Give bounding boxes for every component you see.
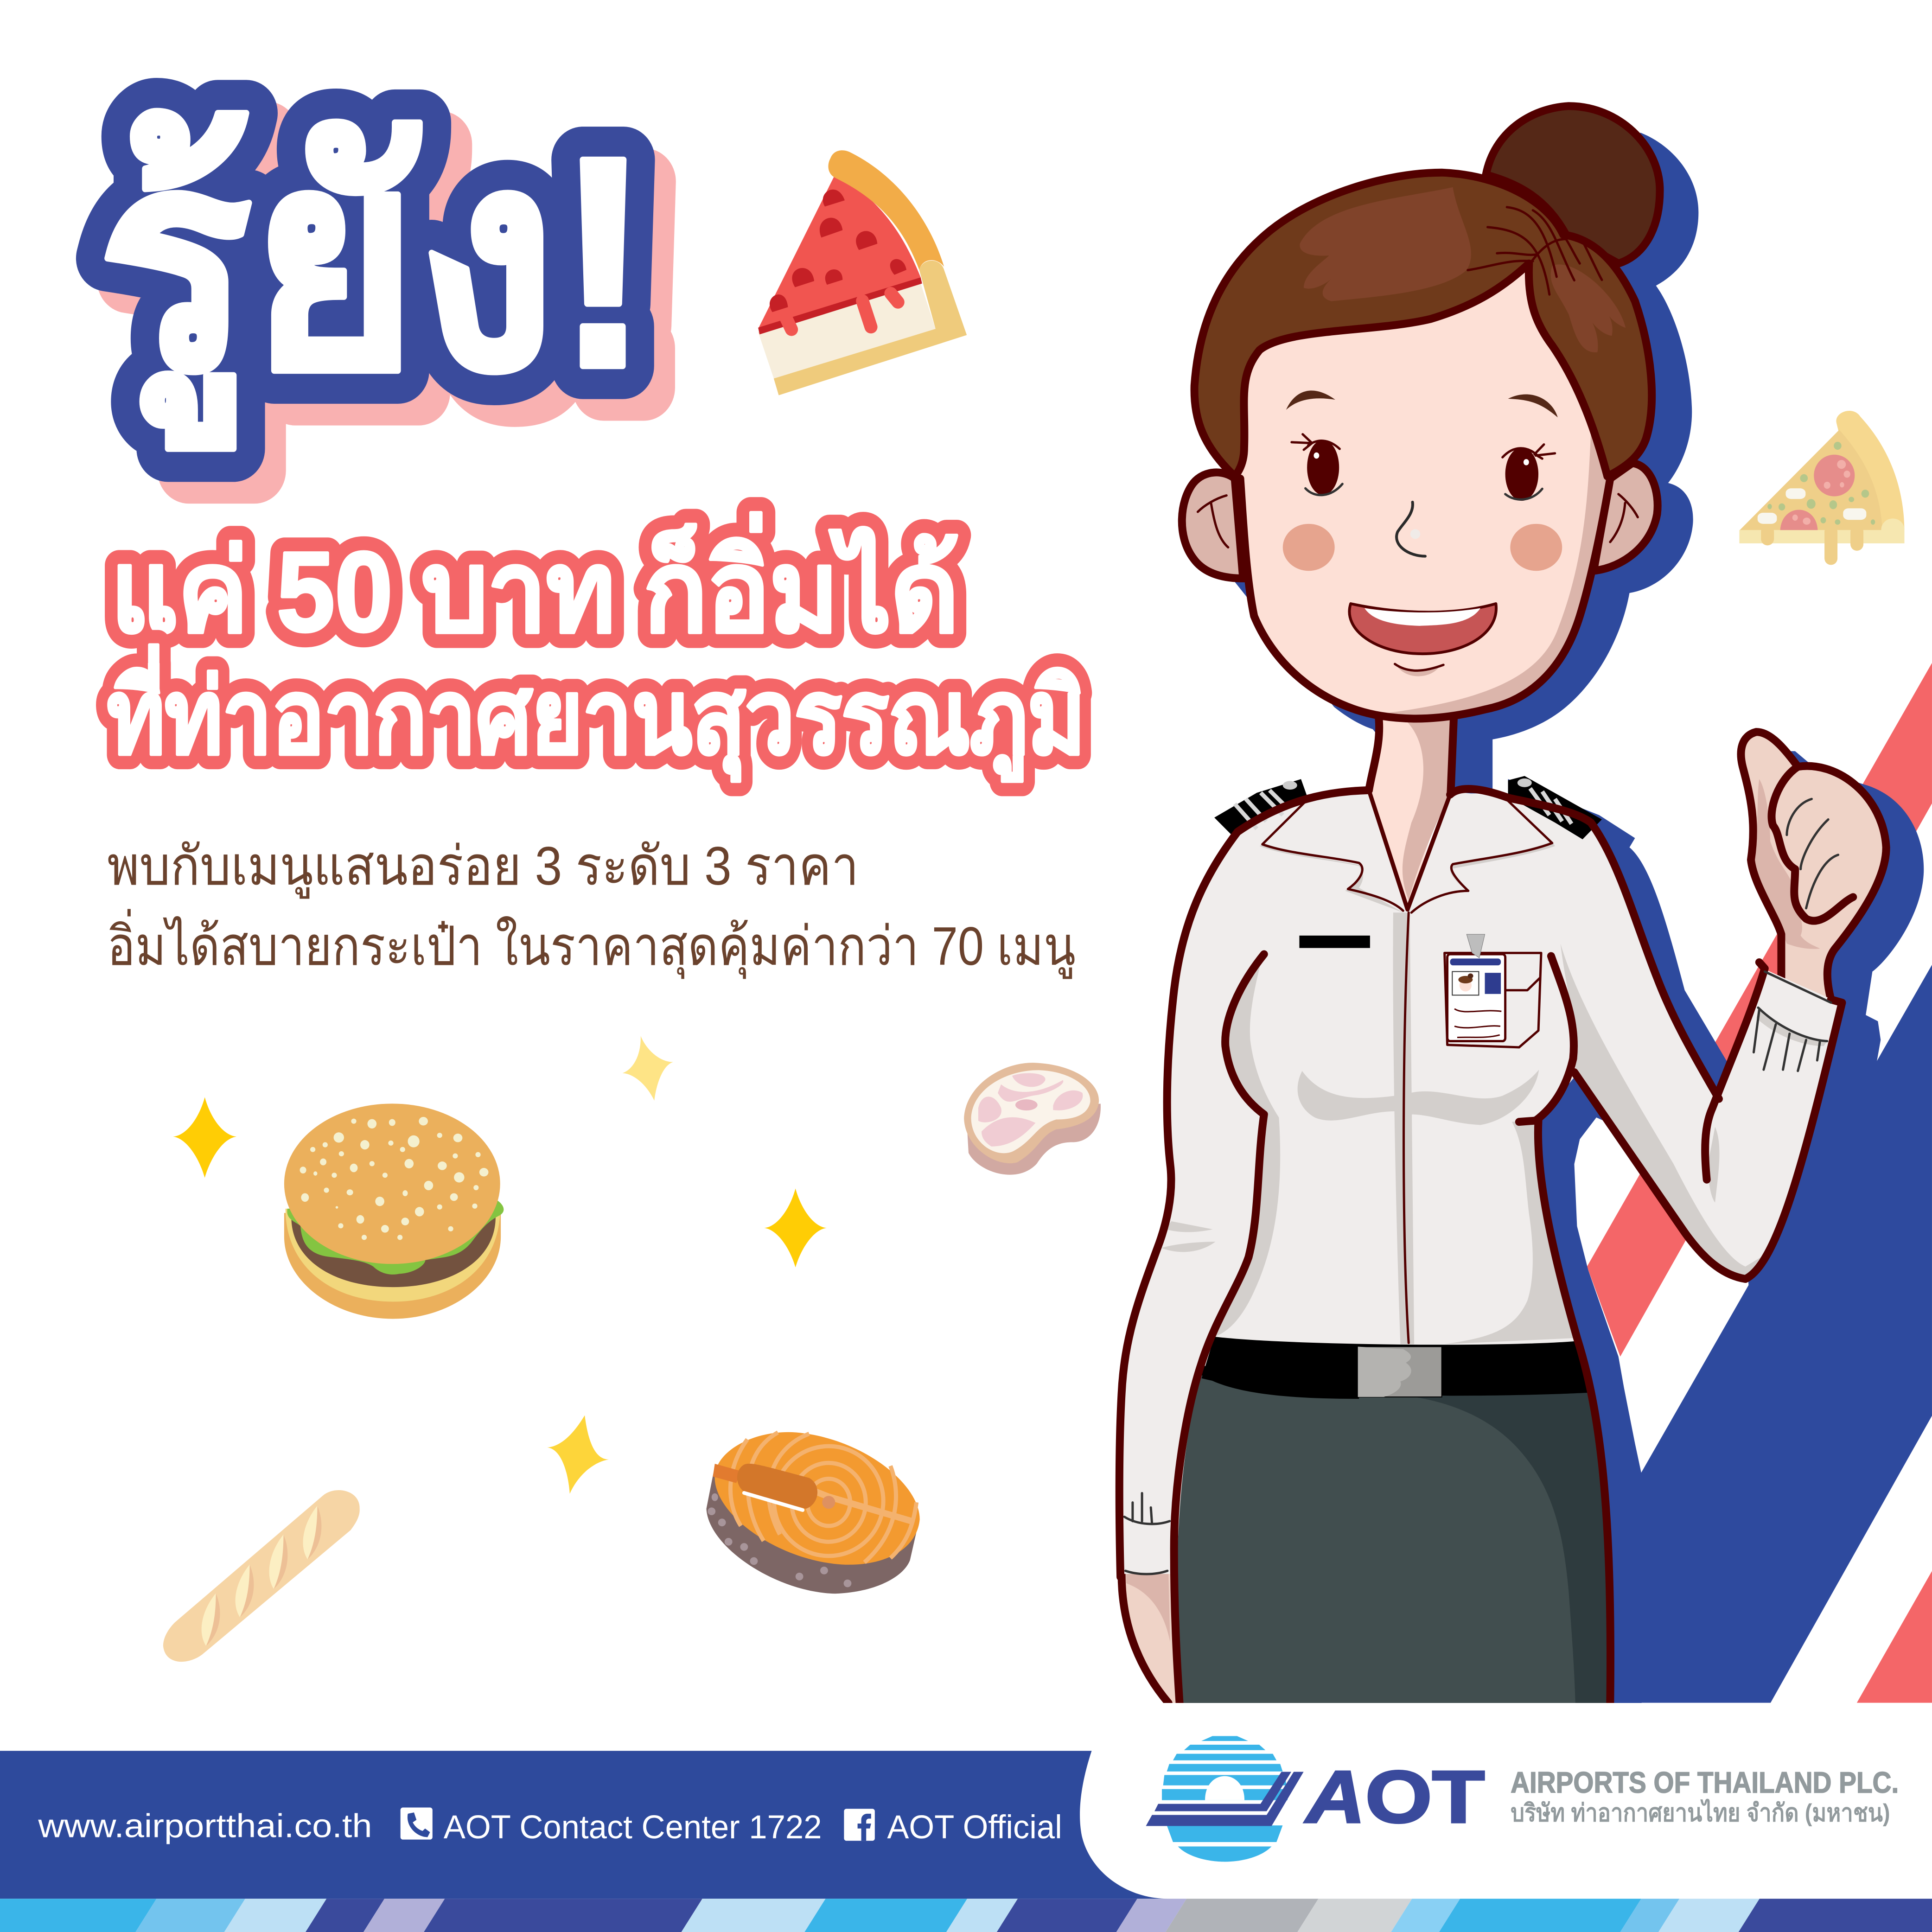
cheeks xyxy=(1283,524,1562,571)
bottom colour stripes xyxy=(0,1899,1932,1932)
company name Thai: บริษัท ท่าอากาศยานไทย จำกัด (มหาชน) xyxy=(1511,1798,1890,1827)
icon: facebook xyxy=(844,1809,875,1841)
logo arch xyxy=(1205,1776,1244,1800)
ears xyxy=(1182,463,1658,578)
footer contact centre: AOT Contact Center 1722 xyxy=(444,1809,822,1846)
hair xyxy=(1194,172,1652,476)
figure: blue shadow xyxy=(1232,133,1924,1703)
bun xyxy=(1486,106,1660,263)
headline: แค่ 50 บาท ก็อิ่มได้: แค่ 50 บาท ก็อิ่มได้ xyxy=(111,512,959,655)
logo wordmark AOT: A xyxy=(1304,1755,1365,1838)
shirt outlines xyxy=(1119,789,1842,1703)
title: รู้ยัง!: รู้ยัง! xyxy=(120,116,671,472)
nose xyxy=(1396,502,1425,556)
diagonal flag stripes xyxy=(1587,663,1932,1703)
headline: แค่ 50 บาท ก็อิ่มได้: แค่ 50 บาท ก็อิ่มได้ xyxy=(111,512,959,655)
left hand xyxy=(1122,1574,1180,1703)
icon: burger xyxy=(284,1103,504,1319)
body text xyxy=(107,835,1076,979)
icon: sparkle lower xyxy=(547,1416,609,1494)
epaulettes xyxy=(1214,776,1602,839)
name bar xyxy=(1299,936,1370,948)
icon: baguette xyxy=(163,1490,360,1662)
logo wordmark AOT: OT xyxy=(1365,1755,1485,1838)
right hand with thumb up xyxy=(1741,732,1886,1003)
figure: head xyxy=(1182,106,1660,719)
ID badge and pocket xyxy=(1445,934,1541,1047)
icon: pizza slice xyxy=(758,150,967,395)
icon: phone xyxy=(401,1808,433,1840)
shirt shading xyxy=(1161,912,1827,1344)
neck xyxy=(1362,714,1454,910)
skirt xyxy=(1176,1375,1611,1703)
collar xyxy=(1260,791,1555,912)
icon: sparkle left xyxy=(173,1097,236,1178)
face xyxy=(1240,263,1610,719)
mouth xyxy=(1349,604,1496,676)
icon: salmon steak xyxy=(707,1432,920,1594)
headline: ที่ท่าอากาศยานสุวรรณภูมิ: ที่ท่าอากาศยานสุวรรณภูมิ xyxy=(107,644,1085,782)
AOT logo xyxy=(1146,1736,1899,1862)
hair highlights xyxy=(1300,187,1626,352)
icon: steak xyxy=(964,1063,1101,1175)
figure: woman in uniform body xyxy=(1119,714,1886,1703)
headline: ที่ท่าอากาศยานสุวรรณภูมิ: ที่ท่าอากาศยานสุวรรณภูมิ xyxy=(107,644,1085,782)
eyebrows xyxy=(1286,390,1558,417)
logo globe xyxy=(1162,1736,1288,1862)
icon: sparkle top xyxy=(623,1036,673,1101)
logo wordmark AOT xyxy=(1304,1755,1485,1838)
shirt xyxy=(1120,790,1839,1574)
eyes xyxy=(1292,434,1555,501)
body text: อิ่มได้สบายกระเป๋า ในราคาสุดคุ้มค่ากว่า 70 เมนู xyxy=(107,909,1076,979)
food icons xyxy=(163,1036,1101,1662)
hair strands xyxy=(1468,207,1602,294)
icon: pizza slice light xyxy=(1739,411,1904,558)
body text: พบกับเมนูแสนอร่อย 3 ระดับ 3 ราคา xyxy=(107,835,859,899)
icon: sparkle centre xyxy=(764,1188,827,1268)
title: รู้ยัง!: รู้ยัง! xyxy=(99,95,650,450)
title: รู้ยัง!: รู้ยัง! xyxy=(99,95,650,450)
footer facebook name: AOT Official xyxy=(887,1809,1062,1846)
footer website: www.airportthai.co.th xyxy=(38,1807,372,1844)
footer bar xyxy=(0,1751,1168,1899)
belt and buckle xyxy=(1202,1337,1590,1399)
logo wings xyxy=(1146,1772,1304,1826)
